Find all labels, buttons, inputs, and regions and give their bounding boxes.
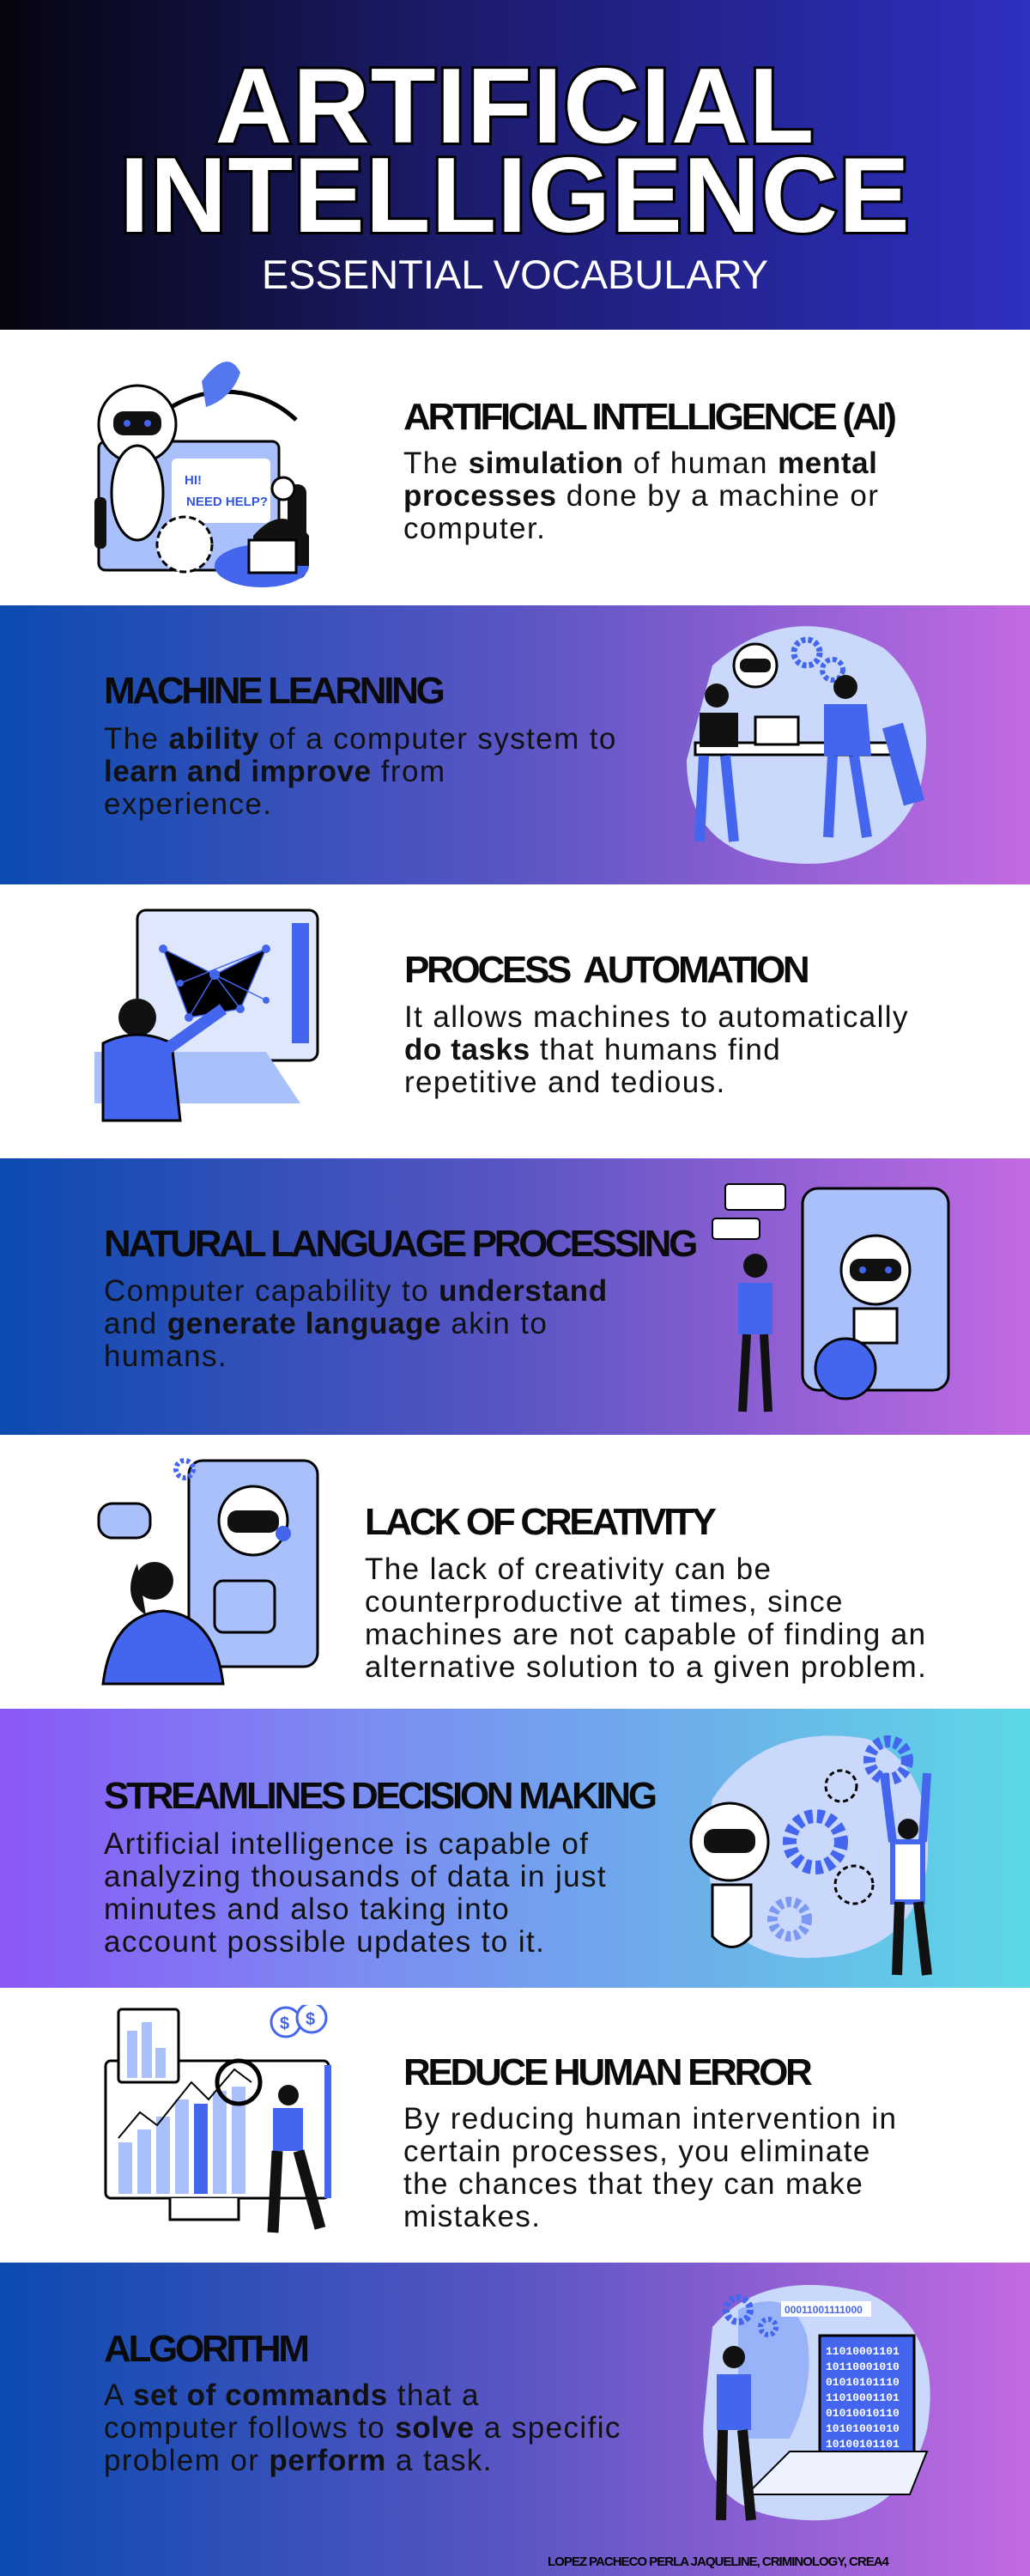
definition: [104, 722, 617, 821]
heading: PROCESS AUTOMATION: [404, 949, 807, 991]
definition: The ability of a computer system to: [104, 722, 617, 756]
icon: chart analysis: $: [280, 2014, 289, 2033]
panel: machine learning: [0, 605, 1030, 884]
icon: robot help desk: HI!: [185, 473, 202, 488]
definition: minutes and also taking into: [104, 1893, 510, 1926]
footer credit: LOPEZ PACHECO PERLA JAQUELINE, CRIMINOLOGY, CREA4: [548, 2555, 888, 2569]
panel: reduce human error: [0, 1988, 1030, 2263]
heading: LACK OF CREATIVITY: [365, 1501, 714, 1543]
icon: network screen: [94, 908, 319, 1121]
definition: analyzing thousands of data in just: [104, 1860, 607, 1893]
definition: [104, 1274, 608, 1373]
panel: streamlines decision making: [0, 1709, 1030, 1988]
definition: computer follows to solve a specific: [104, 2411, 621, 2445]
definition: [403, 2102, 897, 2233]
definition: [404, 1000, 909, 1099]
header: [0, 0, 1030, 330]
icon: binary code thinker: 01010010110: [826, 2407, 900, 2420]
heading: MACHINE LEARNING: [104, 670, 443, 712]
icon: binary code thinker: 10100101101: [826, 2438, 900, 2451]
definition: processes done by a machine or: [403, 479, 879, 513]
icon: binary code thinker: 10110001010: [826, 2360, 900, 2373]
definition: account possible updates to it.: [104, 1925, 545, 1959]
definition: mistakes.: [403, 2200, 541, 2233]
definition: Artificial intelligence is capable of: [104, 1827, 589, 1861]
heading: ALGORITHM: [104, 2328, 307, 2370]
definition: do tasks that humans find: [404, 1033, 781, 1066]
definition: problem or perform a task.: [104, 2444, 493, 2477]
definition: machines are not capable of finding an: [365, 1618, 926, 1651]
definition: certain processes, you eliminate: [403, 2135, 871, 2168]
definition: alternative solution to a given problem.: [365, 1650, 927, 1684]
panel: artificial intelligence: [0, 330, 1030, 605]
definition: It allows machines to automatically: [404, 1000, 909, 1034]
definition: counterproductive at times, since: [365, 1585, 844, 1619]
icon: chart analysis: $: [306, 2010, 315, 2029]
icon: phone robot chat: [712, 1183, 949, 1412]
icon: woman with robot tablet: [98, 1458, 319, 1685]
definition: experience.: [104, 787, 272, 821]
definition: The simulation of human mental: [403, 447, 877, 480]
heading: NATURAL LANGUAGE PROCESSING: [104, 1223, 695, 1265]
definition: Computer capability to understand: [104, 1274, 608, 1308]
panel: process automation: [0, 884, 1030, 1158]
icon: binary code thinker: 10101001010: [826, 2422, 900, 2435]
panel: natural language processing: [0, 1158, 1030, 1435]
subtitle: ESSENTIAL VOCABULARY: [262, 252, 768, 297]
title: INTELLIGENCE: [119, 137, 911, 255]
definition: humans.: [104, 1340, 227, 1373]
definition: [365, 1552, 927, 1684]
icon: binary code thinker: 00011001111000: [785, 2304, 863, 2316]
definition: A set of commands that a: [104, 2379, 480, 2412]
definition: By reducing human intervention in: [403, 2102, 897, 2136]
icon: binary code thinker: [703, 2285, 930, 2521]
heading: ARTIFICIAL INTELLIGENCE (AI): [403, 396, 894, 438]
icon: binary code thinker: 01010101110: [826, 2376, 900, 2389]
definition: and generate language akin to: [104, 1307, 548, 1340]
definition: [104, 1827, 607, 1959]
definition: the chances that they can make: [403, 2167, 863, 2201]
definition: learn and improve from: [104, 755, 445, 788]
panel: algorithm: [0, 2263, 1030, 2576]
heading: REDUCE HUMAN ERROR: [403, 2051, 810, 2093]
definition: [104, 2379, 621, 2477]
panel: lack of creativity: [0, 1435, 1030, 1709]
definition: repetitive and tedious.: [404, 1066, 726, 1099]
definition: [403, 447, 879, 545]
title: [119, 47, 911, 255]
definition: computer.: [403, 512, 546, 545]
icon: robot help desk: NEED HELP?: [186, 495, 268, 509]
icon: robot and gears: [690, 1735, 932, 1976]
heading: STREAMLINES DECISION MAKING: [104, 1775, 655, 1817]
title: ARTIFICIAL: [215, 47, 815, 166]
icon: binary code thinker: 11010001101: [826, 2391, 900, 2404]
icon: binary code thinker: 11010001101: [826, 2345, 900, 2358]
icon: robot help desk: [94, 361, 309, 587]
definition: The lack of creativity can be: [365, 1552, 772, 1586]
icon: team with robot: [687, 626, 926, 864]
icon: chart analysis: [105, 2005, 331, 2233]
